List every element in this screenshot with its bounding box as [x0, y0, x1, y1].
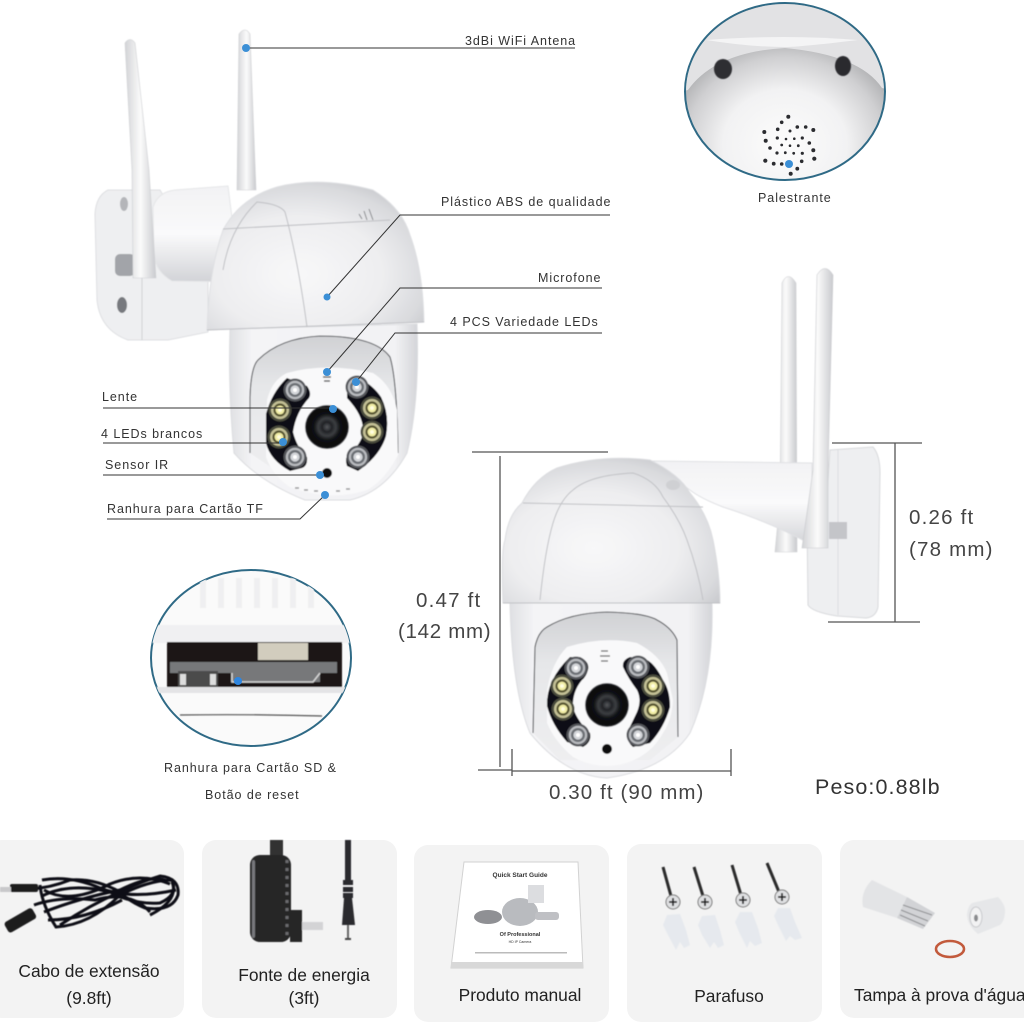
dimension: height [472, 452, 608, 770]
icon: red ring [936, 941, 964, 957]
label: height: (142 mm) [398, 620, 491, 643]
label: cap: Tampa à prova d'água [854, 985, 1024, 1005]
camera 2 back antenna [775, 276, 797, 552]
camera 1 LEDs [268, 376, 384, 468]
panel: screws [627, 844, 822, 1022]
camera 1 inner face [266, 368, 398, 495]
callout: IR sensor [103, 471, 324, 479]
callout: white LEDs [103, 438, 287, 446]
SD marker [234, 677, 242, 685]
speaker side holes [714, 56, 851, 79]
speaker rim highlight [706, 37, 858, 47]
camera 1 housing outline [250, 336, 398, 453]
panel: waterproof cap [840, 840, 1024, 1018]
callout: antenna [242, 44, 575, 52]
camera 2 wall plate [807, 447, 880, 618]
camera 2 dome seam [503, 473, 720, 603]
label: SD slot [164, 761, 337, 802]
camera 2 lens [585, 683, 629, 727]
label: SD slot: Botão de reset [205, 788, 300, 802]
label: SD slot: Ranhura para Cartão SD & [164, 761, 337, 775]
icon: screws and anchors [663, 863, 802, 950]
camera 1 lower body [230, 324, 418, 500]
camera 2 LEDs [550, 656, 664, 746]
camera 1 black LED bands [266, 378, 387, 471]
callouts on camera 1 [103, 44, 610, 519]
camera 1 vent marks [359, 209, 373, 220]
speaker dome rim [686, 4, 884, 90]
camera 2 dome [502, 458, 720, 603]
panel: manual [414, 845, 609, 1022]
SD slot detail circle [150, 570, 352, 746]
camera 2 product photo [502, 268, 880, 778]
camera 1 lens [305, 405, 349, 449]
camera 2 mic holes [600, 651, 610, 661]
camera 2 lower body [510, 603, 712, 778]
camera 1 wall mount [95, 190, 208, 340]
label: depth: (78 mm) [909, 538, 994, 561]
callout: TF slot [107, 491, 329, 519]
label: width: 0.30 ft (90 mm) [549, 781, 704, 804]
label: manual: Produto manual [459, 985, 581, 1005]
speaker grille dots [762, 115, 816, 176]
camera 1 mount plate edge [141, 188, 143, 340]
label: depth: 0.26 ft [909, 506, 974, 529]
label: speaker: Palestrante [758, 191, 832, 205]
camera 1 dome seam [207, 202, 424, 330]
label: TF slot: Ranhura para Cartão TF [107, 502, 264, 516]
camera 1 TF slot vents [295, 488, 350, 491]
camera 1 left antenna [125, 40, 156, 278]
label: height [398, 589, 491, 643]
label: IR sensor: Sensor IR [105, 458, 169, 472]
label: screws: Parafuso [694, 986, 764, 1006]
label: depth [909, 506, 994, 561]
icon: power cord [342, 840, 355, 940]
label: LEDs variety: 4 PCS Variedade LEDs [450, 315, 599, 329]
camera 2 face housing [533, 612, 678, 760]
panel: extension cable [0, 840, 184, 1018]
camera 2 front antenna [802, 268, 833, 548]
camera 1 dome [207, 182, 424, 330]
icon: manual booklet: Of Professional [500, 932, 541, 938]
camera 2 sensor dimple [666, 480, 680, 490]
label: antenna: 3dBi WiFi Antena [465, 34, 576, 48]
camera 2 IR sensor [602, 744, 612, 754]
camera 1 IR sensor [322, 468, 332, 478]
camera 2 arm [650, 461, 812, 545]
label: lens: Lente [102, 390, 138, 404]
label: cable: (9.8ft) [66, 988, 112, 1008]
dimension: width [512, 749, 731, 776]
label: white LEDs: 4 LEDs brancos [101, 427, 203, 441]
icon: manual booklet [451, 862, 583, 968]
icon: manual booklet: HD IP Camera [509, 940, 531, 944]
camera 2 plate seam and clip [829, 450, 847, 615]
camera 1 right antenna [237, 30, 256, 190]
camera 1 mount screw holes [115, 197, 135, 313]
label: cable [18, 961, 160, 1008]
label: power: Fonte de energia [238, 965, 370, 985]
icon: cap [967, 897, 1005, 934]
icon: power adapter [250, 840, 323, 942]
dimension: depth [828, 443, 922, 622]
callout: plastic [324, 215, 610, 300]
label: power: (3ft) [289, 988, 319, 1008]
label: microphone: Microfone [538, 271, 601, 285]
icon: cable [0, 876, 178, 934]
camera 1 bracket arm [153, 186, 240, 282]
camera 2 black LED bands [547, 657, 670, 747]
speaker detail circle [680, 0, 890, 180]
label: cable: Cabo de extensão [18, 961, 160, 981]
camera 1 product photo [95, 30, 424, 500]
camera 1 mic holes [323, 377, 331, 381]
camera 2 housing outline [533, 612, 678, 737]
callout: microphone [323, 288, 602, 376]
slot housing [150, 578, 352, 716]
callout: lens [103, 405, 337, 413]
camera 2 inner face [547, 640, 673, 766]
speaker marker [785, 160, 793, 168]
label: height: 0.47 ft [416, 589, 481, 612]
callout: LEDs variety [352, 333, 602, 386]
camera 1 face housing [250, 336, 398, 480]
label: plastic: Plástico ABS de qualidade [441, 195, 611, 209]
panel: power supply [202, 840, 397, 1018]
label: power [238, 965, 370, 1008]
label: weight: Peso:0.88lb [815, 775, 941, 799]
icon: waterproof gland [862, 880, 935, 929]
icon: manual booklet: Quick Start Guide [493, 872, 548, 879]
